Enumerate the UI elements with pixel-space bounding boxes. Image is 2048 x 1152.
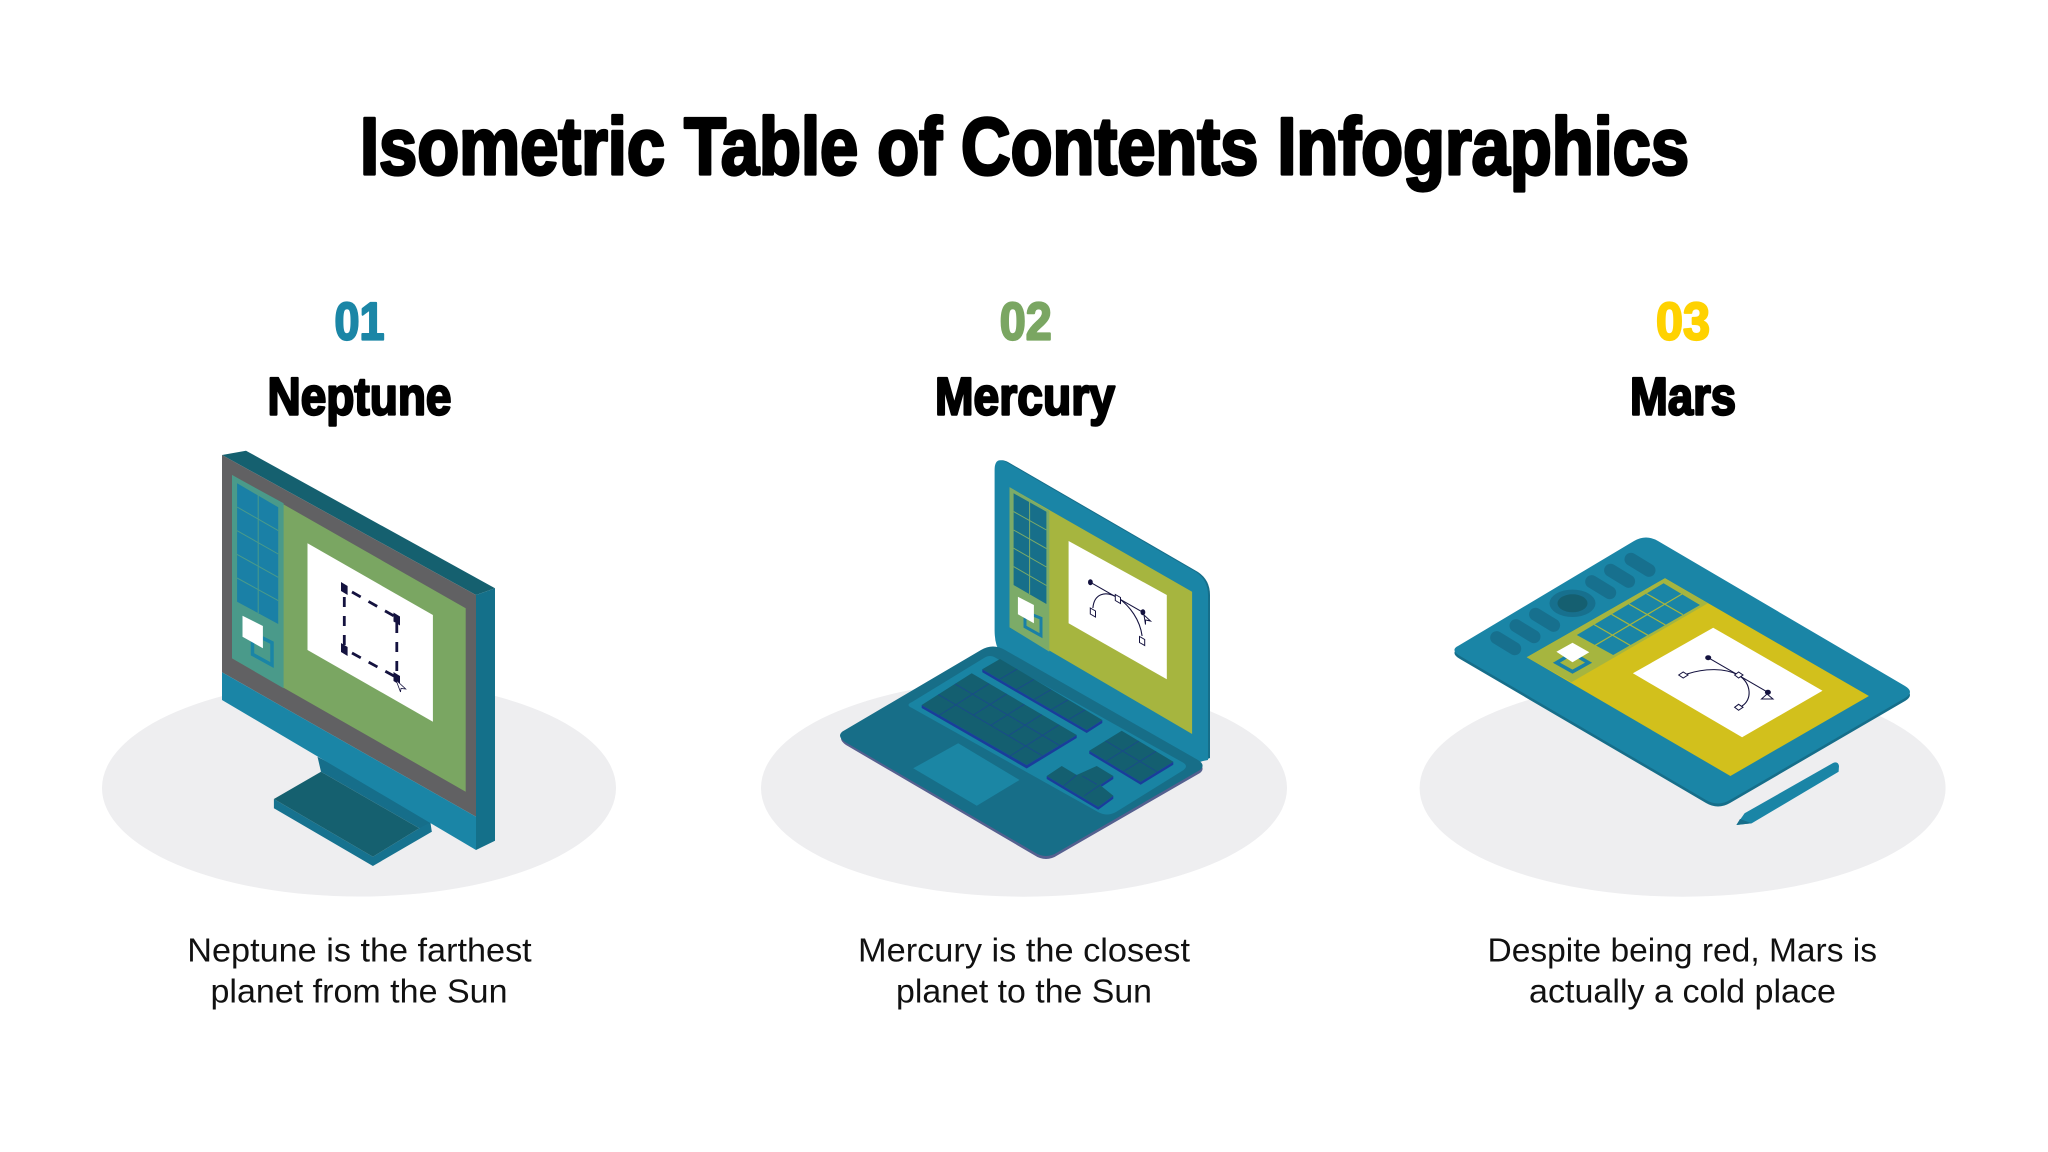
number 02: 02 bbox=[1000, 292, 1052, 352]
icon: desktop monitor bbox=[222, 451, 495, 866]
platform ellipse bbox=[1420, 679, 1946, 897]
title: Isometric Table of Contents Infographics bbox=[360, 102, 1689, 192]
description: actually a cold place bbox=[1529, 974, 1836, 1010]
description bbox=[1488, 933, 1877, 1010]
description: Neptune is the farthest bbox=[187, 933, 532, 970]
number 03: 03 bbox=[1656, 292, 1710, 352]
number 01: 01 bbox=[334, 292, 384, 352]
icon: laptop bbox=[840, 460, 1210, 859]
description: Mercury is the closest bbox=[858, 933, 1191, 970]
platform ellipse bbox=[761, 679, 1287, 897]
description bbox=[187, 933, 532, 1010]
description: planet to the Sun bbox=[896, 974, 1152, 1010]
heading Mars: Mars bbox=[1630, 368, 1736, 426]
icon: stylus pen bbox=[1736, 762, 1839, 825]
panel: Mercury bbox=[761, 292, 1287, 1010]
description: planet from the Sun bbox=[210, 974, 508, 1010]
panel: Neptune bbox=[102, 292, 616, 1010]
description: Despite being red, Mars is bbox=[1488, 933, 1877, 970]
platform ellipse bbox=[102, 680, 616, 896]
description bbox=[858, 933, 1191, 1010]
icon: graphics tablet bbox=[1454, 538, 1910, 806]
heading Neptune: Neptune bbox=[268, 368, 452, 426]
heading Mercury: Mercury bbox=[935, 368, 1115, 426]
panel: Mars bbox=[1420, 292, 1946, 1010]
